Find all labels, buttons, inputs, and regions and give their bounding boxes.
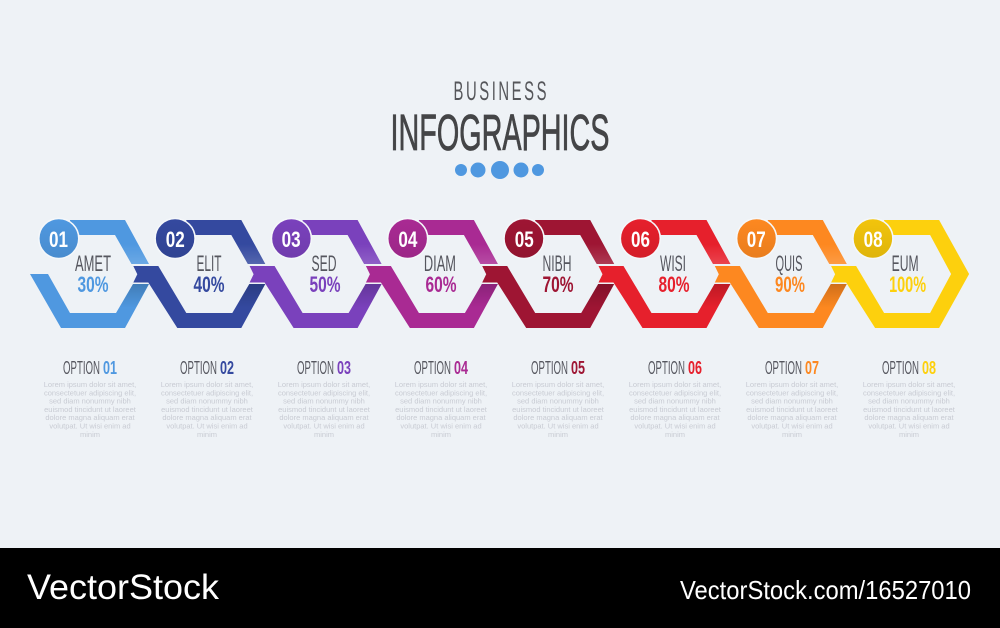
step 7 badge: 07 — [747, 227, 766, 252]
option 1 description: volutpat. Ut wisi enim ad — [49, 422, 131, 430]
step 8 percent: 100% — [889, 272, 926, 297]
option 6 description: euismod tincidunt ut laoreet — [629, 405, 722, 414]
option 2 description: dolore magna aliquam erat — [162, 413, 253, 422]
option 5 description: euismod tincidunt ut laoreet — [512, 405, 605, 414]
option 4 description — [395, 380, 488, 439]
option 8 description: volutpat. Ut wisi enim ad — [868, 422, 950, 430]
option 7 heading: 07 — [805, 358, 819, 378]
step 4 hexagon — [366, 218, 498, 328]
option 5 description: sed diam nonummy nibh — [517, 397, 599, 406]
step 5 badge: 05 — [515, 227, 534, 252]
option 4 description: consectetuer adipiscing elit, — [395, 388, 487, 397]
option 4 description: dolore magna aliquam erat — [396, 413, 487, 422]
option 7 description: consectetuer adipiscing elit, — [746, 388, 838, 397]
option 5 text block — [512, 358, 605, 439]
option 8 description: sed diam nonummy nibh — [868, 397, 950, 406]
option 8 text block — [863, 358, 956, 439]
option 6 heading: 06 — [688, 358, 702, 378]
option 5 heading: 05 — [571, 358, 585, 378]
step 3 percent: 50% — [310, 272, 341, 297]
option 7 description: euismod tincidunt ut laoreet — [746, 405, 839, 414]
step 6 badge: 06 — [631, 227, 650, 252]
step 7 hexagon — [715, 218, 847, 328]
option 3 description: euismod tincidunt ut laoreet — [278, 405, 371, 414]
option 2 description: Lorem ipsum dolor sit amet, — [161, 380, 253, 389]
option 8 description: euismod tincidunt ut laoreet — [863, 405, 956, 414]
option 8 description: dolore magna aliquam erat — [864, 413, 955, 422]
option 8 heading: OPTION — [882, 358, 919, 378]
option 2 description: euismod tincidunt ut laoreet — [161, 405, 254, 414]
option 4 description: sed diam nonummy nibh — [400, 397, 482, 406]
option 1 description: dolore magna aliquam erat — [45, 413, 136, 422]
step 3 hexagon — [250, 218, 382, 328]
step 1 badge: 01 — [49, 227, 68, 252]
step 4 label: DIAM — [424, 251, 456, 276]
step 6 percent: 80% — [658, 272, 690, 297]
option 7 description: minim — [782, 430, 802, 439]
option 1 description: minim — [80, 430, 100, 439]
option 7 description: sed diam nonummy nibh — [751, 397, 833, 406]
option 6 text block — [629, 358, 722, 439]
step 8 label: EUM — [892, 251, 919, 276]
option 3 description: Lorem ipsum dolor sit amet, — [278, 380, 370, 389]
option 1 description: sed diam nonummy nibh — [49, 397, 131, 406]
option 5 description: volutpat. Ut wisi enim ad — [517, 422, 599, 430]
option 7 description: Lorem ipsum dolor sit amet, — [746, 380, 838, 389]
step 2 badge: 02 — [166, 227, 185, 252]
option 2 description: volutpat. Ut wisi enim ad — [166, 422, 248, 430]
option 7 description: volutpat. Ut wisi enim ad — [751, 422, 833, 430]
option 2 description: consectetuer adipiscing elit, — [161, 388, 253, 397]
heading: business: BUSINESS — [454, 77, 546, 106]
option 4 description: volutpat. Ut wisi enim ad — [400, 422, 482, 430]
option 1 heading: OPTION — [63, 358, 100, 378]
option 5 description — [512, 380, 605, 439]
option 3 description: sed diam nonummy nibh — [283, 397, 365, 406]
option 6 description: consectetuer adipiscing elit, — [629, 388, 721, 397]
option 3 description — [278, 380, 371, 439]
option 3 heading: 03 — [337, 358, 351, 378]
option 1 heading: 01 — [103, 358, 117, 378]
option 4 heading: OPTION — [414, 358, 451, 378]
heading: infographics: INFOGRAPHICS — [390, 104, 610, 161]
step 2 hexagon — [133, 218, 265, 328]
option 7 text block — [746, 358, 839, 439]
footer logo: VectorStock — [27, 568, 220, 607]
step 8 badge: 08 — [864, 227, 883, 252]
step 1 label: AMET — [75, 251, 111, 276]
option 5 description: dolore magna aliquam erat — [513, 413, 604, 422]
option 4 description: minim — [431, 430, 451, 439]
step 6 hexagon — [598, 218, 730, 328]
step 1 percent: 30% — [78, 272, 108, 297]
option 6 description: sed diam nonummy nibh — [634, 397, 716, 406]
option 2 heading: OPTION — [180, 358, 217, 378]
step 5 percent: 70% — [543, 272, 574, 297]
option 7 description: dolore magna aliquam erat — [747, 413, 838, 422]
option 6 description — [629, 380, 722, 439]
option 1 text block — [44, 358, 137, 439]
option 6 heading: OPTION — [648, 358, 685, 378]
option 2 heading: 02 — [220, 358, 234, 378]
option 5 description: Lorem ipsum dolor sit amet, — [512, 380, 604, 389]
option 2 text block — [161, 358, 254, 439]
option 2 description — [161, 380, 254, 439]
title dots — [455, 161, 544, 179]
option 1 description — [44, 380, 137, 439]
option 5 description: consectetuer adipiscing elit, — [512, 388, 604, 397]
option 7 heading: OPTION — [765, 358, 802, 378]
option 2 description: minim — [197, 430, 217, 439]
option 8 description: minim — [899, 430, 919, 439]
option 3 description: minim — [314, 430, 334, 439]
option 8 description: Lorem ipsum dolor sit amet, — [863, 380, 955, 389]
step 3 label: SED — [312, 251, 337, 276]
step 6 label: WISI — [660, 251, 686, 276]
option 3 description: consectetuer adipiscing elit, — [278, 388, 370, 397]
step 8 hexagon — [831, 218, 969, 328]
option 5 heading: OPTION — [531, 358, 568, 378]
option 1 description: euismod tincidunt ut laoreet — [44, 405, 137, 414]
option 8 description — [863, 380, 956, 439]
option 6 description: Lorem ipsum dolor sit amet, — [629, 380, 721, 389]
option 8 heading: 08 — [922, 358, 936, 378]
footer bar — [0, 548, 1000, 628]
option 4 heading: 04 — [454, 358, 468, 378]
option 4 text block — [395, 358, 488, 439]
step 5 hexagon — [482, 218, 614, 328]
step 4 badge: 04 — [398, 227, 418, 252]
option 5 description: minim — [548, 430, 568, 439]
option 6 description: dolore magna aliquam erat — [630, 413, 721, 422]
option 3 text block — [278, 358, 371, 439]
step 1 hexagon — [30, 218, 149, 328]
option 1 description: consectetuer adipiscing elit, — [44, 388, 136, 397]
option 6 description: volutpat. Ut wisi enim ad — [634, 422, 716, 430]
option 1 description: Lorem ipsum dolor sit amet, — [44, 380, 136, 389]
option 3 heading: OPTION — [297, 358, 334, 378]
option 2 description: sed diam nonummy nibh — [166, 397, 248, 406]
footer url: VectorStock.com/16527010 — [680, 575, 971, 605]
step 5 label: NIBH — [543, 251, 572, 276]
step 7 percent: 90% — [775, 272, 805, 297]
option 3 description: volutpat. Ut wisi enim ad — [283, 422, 365, 430]
option 7 description — [746, 380, 839, 439]
step 3 badge: 03 — [282, 227, 301, 252]
option 8 description: consectetuer adipiscing elit, — [863, 388, 955, 397]
option 3 description: dolore magna aliquam erat — [279, 413, 370, 422]
option 6 description: minim — [665, 430, 685, 439]
title — [390, 77, 610, 161]
step 2 percent: 40% — [194, 272, 224, 297]
option 4 description: Lorem ipsum dolor sit amet, — [395, 380, 487, 389]
step 7 label: QUIS — [775, 251, 802, 276]
option 4 description: euismod tincidunt ut laoreet — [395, 405, 488, 414]
step 4 percent: 60% — [425, 272, 456, 297]
step 2 label: ELIT — [196, 251, 222, 276]
